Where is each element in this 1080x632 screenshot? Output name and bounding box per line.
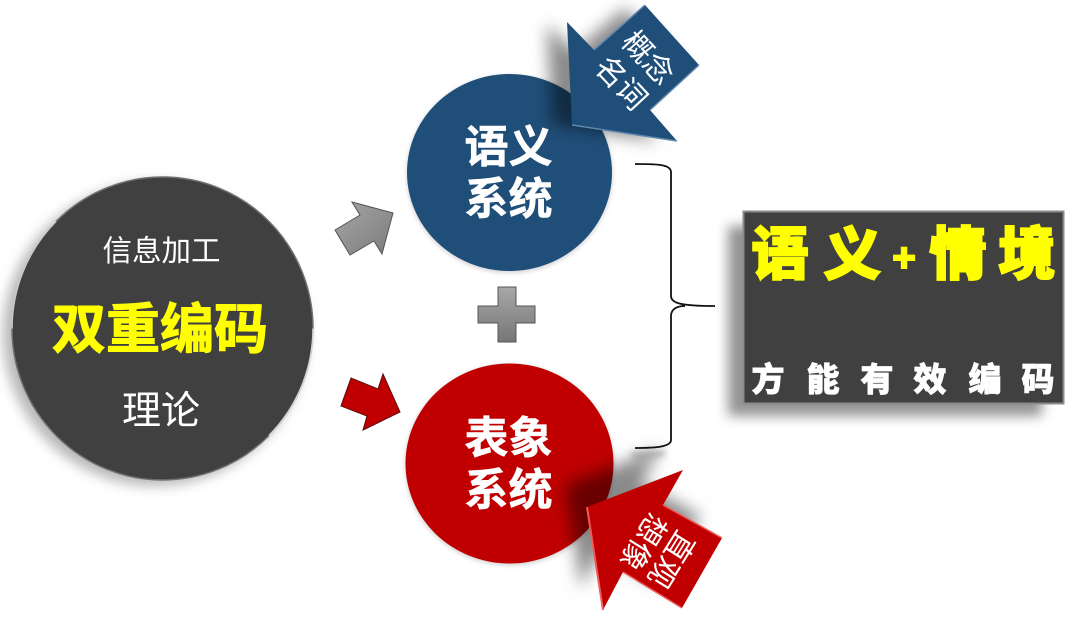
text: imagery system label: 系统 (464, 466, 552, 515)
plus sign (478, 287, 535, 342)
text: imagery system label: 表象 (464, 414, 552, 463)
text: can effectively encode: 方 (752, 361, 784, 398)
text: semantic plus context: 义 (824, 223, 880, 287)
arrow: intuition and imagination callout (565, 448, 722, 610)
text: can effectively encode (752, 361, 1054, 398)
arrow: grey to semantic system (335, 202, 393, 255)
text: concept noun: 概念 (615, 25, 680, 92)
text: concept noun: 名词 (588, 50, 653, 117)
text: information processing: 信息加工 (102, 235, 221, 268)
text: semantic plus context (752, 223, 1056, 287)
arrow: concept and noun callout (547, 5, 699, 141)
text: semantic plus context: 情 (930, 223, 986, 287)
text: semantic system label: 系统 (464, 175, 552, 224)
brace (630, 164, 715, 462)
text: intuition imagination: 想像 (613, 507, 673, 576)
text: can effectively encode: 编 (968, 361, 1002, 398)
text: can effectively encode: 能 (806, 361, 840, 398)
text: semantic system label: 语义 (464, 123, 552, 172)
circle: imagery system (405, 364, 614, 566)
circle: dual coding theory (3, 177, 313, 486)
text: semantic plus context: 语 (752, 223, 808, 287)
text: semantic plus context: 境 (998, 223, 1056, 287)
text: semantic plus context: + (892, 236, 916, 280)
text: can effectively encode: 效 (914, 361, 946, 398)
box: semantic plus context (728, 212, 1064, 416)
arrow: red to imagery system (341, 374, 400, 430)
text: theory: 理论 (122, 390, 200, 433)
text: can effectively encode: 有 (860, 361, 894, 398)
text: dual coding: 双重编码 (52, 300, 268, 360)
text: can effectively encode: 码 (1022, 361, 1054, 398)
text: intuition imagination: 直观 (641, 525, 701, 593)
circle: semantic system (406, 74, 612, 273)
